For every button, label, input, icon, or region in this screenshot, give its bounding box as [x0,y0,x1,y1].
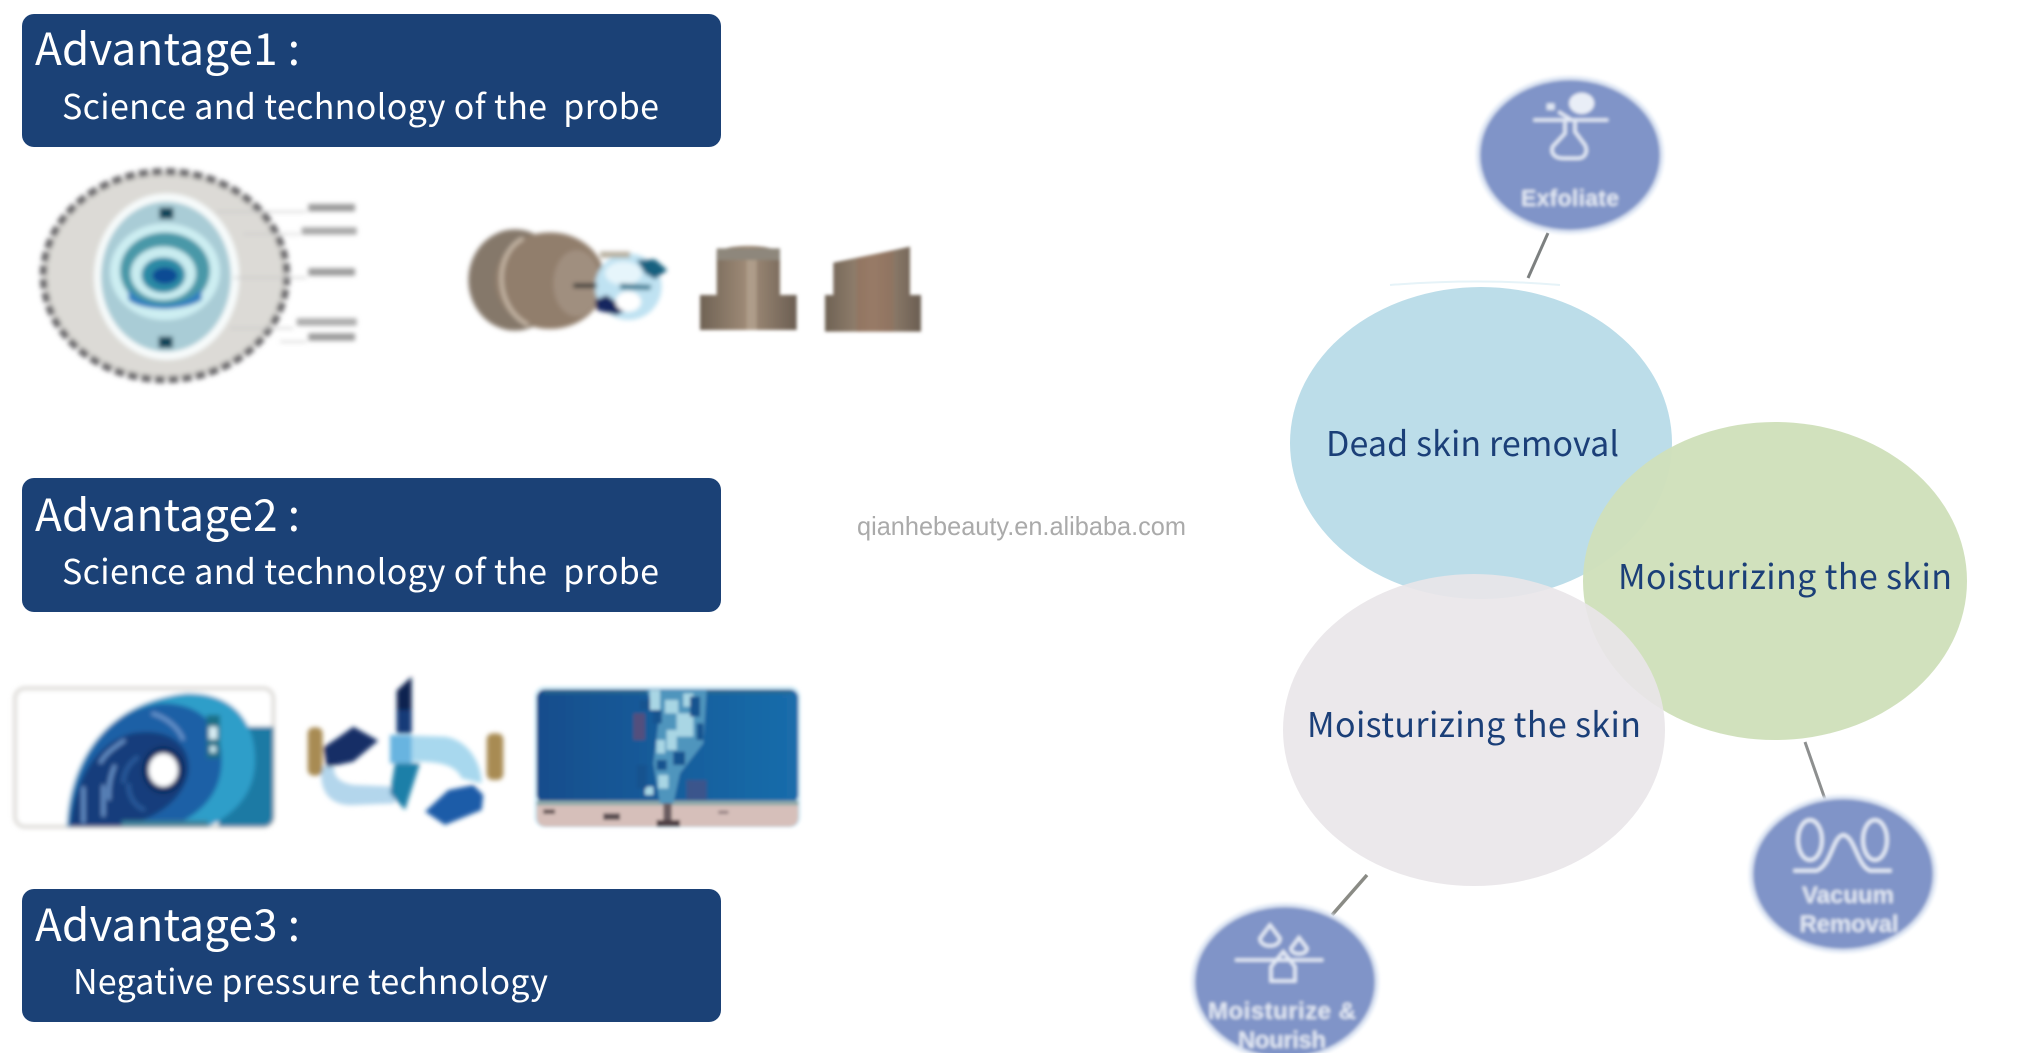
badge: moisturize and nourish: Moisturize & [1208,998,1356,1025]
icon: vacuum [1793,820,1892,871]
watermark: qianhebeauty.en.alibaba.com [857,511,1186,541]
badge: vacuum removal: Removal [1800,911,1898,938]
image: flat-top probe [700,246,797,330]
icon: exfoliate [1533,93,1608,158]
diagram: probe spiral disc with labels [43,172,357,380]
ellipse: dead skin removal [1290,282,1672,599]
banner: advantage 1 [22,14,721,147]
connector: moisturize and nourish [1332,875,1367,915]
image: water swirl in frame [15,688,273,827]
banner: advantage 2 [22,478,721,612]
banner: advantage 2: Science and technology of the probe [62,545,659,594]
banner: advantage 2: Advantage2 : [35,480,300,544]
image: round probe head [468,229,667,331]
diagram: circulating arrows [308,677,503,825]
badge: moisturize and nourish [1191,903,1379,1053]
ellipse: moisturizing the skin (green): Moisturizing the skin [1618,550,1952,599]
badge: exfoliate [1476,76,1664,234]
connector: vacuum removal [1805,742,1826,802]
image: slanted probe [825,247,921,332]
banner: advantage 3: Advantage3 : [35,890,300,954]
ellipse: moisturizing the skin (grey): Moisturizing the skin [1307,698,1641,747]
ellipse: dead skin removal: Dead skin removal [1326,417,1619,466]
connector: exfoliate [1528,233,1548,278]
banner: advantage 3 [22,889,721,1022]
image: water bubbles above skin [534,686,801,828]
ellipse: moisturizing the skin (grey) [1283,574,1665,886]
icon: drops [1235,925,1323,981]
badge: vacuum removal [1749,795,1937,953]
badge: exfoliate: Exfoliate [1521,185,1619,211]
banner: advantage 3: Negative pressure technology [73,955,548,1004]
banner: advantage 1: Advantage1 : [35,14,300,78]
ellipse: moisturizing the skin (green) [1583,422,1967,740]
banner: advantage 1: Science and technology of the probe [62,80,659,129]
badge: vacuum removal: Vacuum [1802,882,1894,909]
